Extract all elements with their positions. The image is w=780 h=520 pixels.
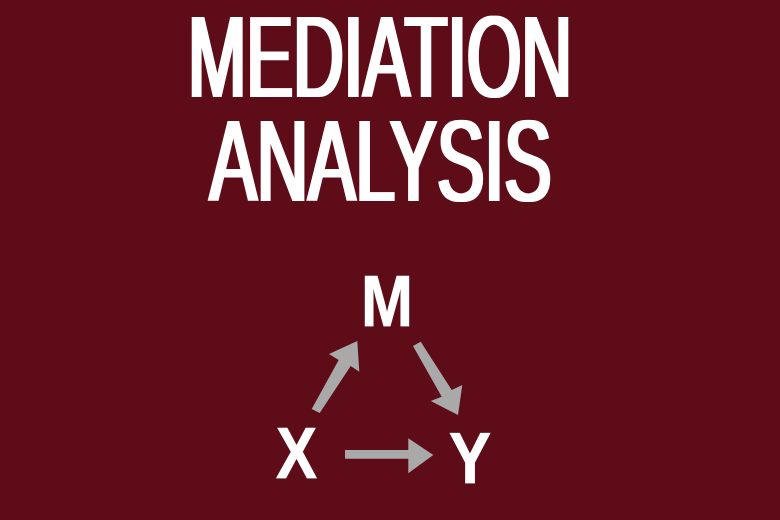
title: mediation analysis <box>188 0 572 226</box>
node label: Y: Y <box>449 419 491 499</box>
arrow: M to Y <box>413 342 462 415</box>
arrow: X to Y <box>345 438 433 473</box>
title line 2: ANALYSIS <box>210 96 552 226</box>
mediation diagram <box>276 262 491 499</box>
arrow: X to M <box>312 341 359 413</box>
node label: M: M <box>361 262 413 342</box>
node label: X: X <box>276 414 317 494</box>
